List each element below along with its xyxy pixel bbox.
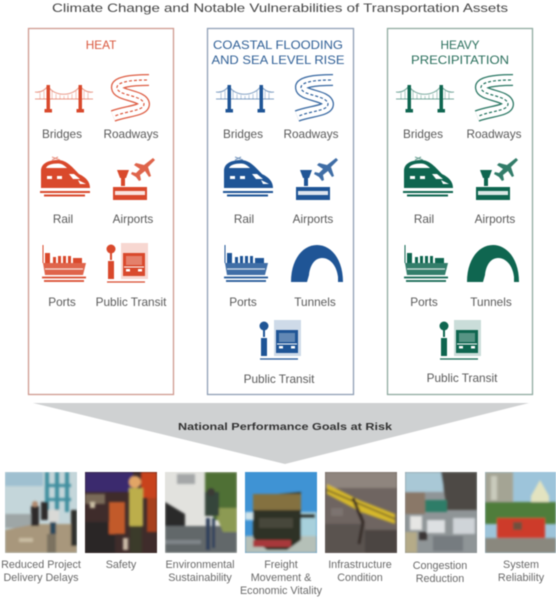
label: rail: Rail [53,212,73,226]
icon: rail [223,157,273,196]
title: Climate Change and Notable Vulnerabilities of Transportation Assets [52,1,508,15]
caption: safety: Safety [106,559,137,571]
caption: infrastructure condition: Infrastructure [328,559,392,571]
icon: roadways [113,80,149,116]
icon: airports [476,158,518,200]
label: bridges: Bridges [403,127,443,141]
label: bridges: Bridges [42,127,82,141]
photo: infrastructure condition [325,472,397,553]
caption: congestion reduction: Reduction [416,573,464,585]
label: rail: Rail [414,212,434,226]
funnel arrow [33,403,529,464]
label: roadways: Roadways [283,127,339,141]
label: tunnels: Tunnels [294,295,336,309]
label: airports: Airports [293,212,333,226]
caption: freight movement and economic vitality: Economic Vitality [240,585,323,597]
caption: system reliability: Reliability [498,572,545,584]
label: bridges: Bridges [223,127,263,141]
label: public transit: Public Transit [244,372,315,386]
label: airports: Airports [475,212,515,226]
caption: reduced project delivery delays: Reduced Project [1,559,81,571]
label: tunnels: Tunnels [470,295,512,309]
icon: airports [113,158,155,200]
icon: roadways [297,80,333,116]
panel: coastal flooding and sea level rise [208,28,354,394]
heading: heat: HEAT [86,38,116,52]
panel: heat [28,28,174,394]
label: ports: Ports [410,295,438,309]
icon: public transit [260,320,301,359]
label: public transit: Public Transit [427,371,498,385]
caption: system reliability: System [503,559,539,571]
caption: congestion reduction: Congestion [413,560,467,572]
caption: freight movement and economic vitality: Freight [264,559,298,571]
label: ports: Ports [48,295,76,309]
label: airports: Airports [113,212,153,226]
caption: freight movement and economic vitality: Movement & [251,572,312,584]
icon: tunnels [291,245,343,282]
photo: congestion reduction [405,472,477,553]
icon: public transit [106,243,148,282]
icon: public transit [440,320,481,359]
icon: bridges [35,85,93,112]
label: ports: Ports [229,295,257,309]
icon: bridges [396,85,454,112]
icon: rail [40,157,90,196]
heading: sea level rise: AND SEA LEVEL RISE [212,53,345,67]
panel: heavy precipitation [388,28,532,394]
heading: precipitation: PRECIPITATION [411,53,509,67]
caption: environmental sustainability: Environmental [165,559,235,571]
icon: ports [224,245,268,281]
icon: ports [42,245,86,281]
label: roadways: Roadways [466,127,522,141]
label: rail: Rail [234,212,254,226]
icon: bridges [216,85,274,112]
heading: heavy: HEAVY [440,38,480,52]
label: public transit: Public Transit [96,295,167,309]
caption: reduced project delivery delays: Delivery Delays [4,572,79,584]
icon: airports [296,158,338,200]
icon: roadways [477,80,513,116]
photo: freight movement and economic vitality [245,472,317,553]
label: roadways: Roadways [103,127,159,141]
icon: ports [404,245,448,281]
caption: infrastructure condition: Condition [337,572,383,584]
photo: reduced project delivery delays [5,472,77,553]
icon: tunnels [467,245,519,282]
photo: environmental sustainability [165,472,237,553]
funnel heading: National Performance Goals at Risk [178,421,392,433]
icon: rail [403,157,453,196]
caption: environmental sustainability: Sustainability [168,572,232,584]
photo: system reliability [485,472,556,553]
photo: safety [85,472,157,553]
heading: coastal flooding: COASTAL FLOODING [213,38,343,52]
